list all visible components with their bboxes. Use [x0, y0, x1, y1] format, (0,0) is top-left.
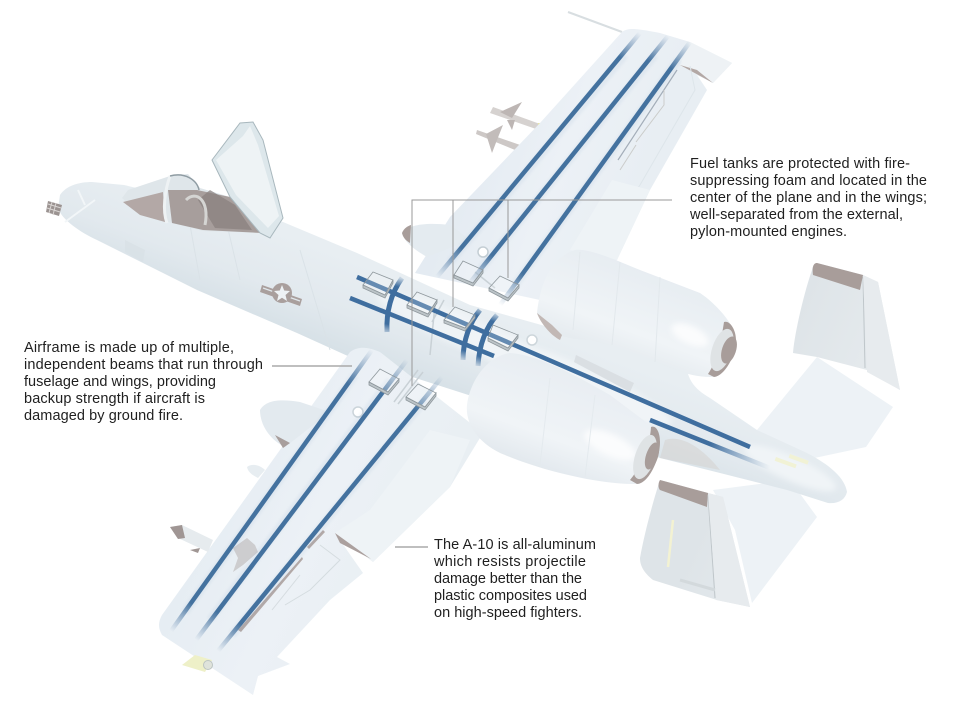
insignia on wing	[233, 538, 258, 572]
lower wing	[159, 348, 483, 695]
flap tracks and slats	[394, 272, 495, 404]
callout: fuel tanks: center of the plane and in the wings;	[690, 190, 927, 206]
callout: aluminum: which resists projectile	[433, 554, 586, 570]
tank 4	[488, 325, 518, 351]
horizontal stabilizer: upper	[757, 357, 893, 460]
vertical fin: upper	[793, 263, 900, 390]
insignia: star	[260, 283, 302, 306]
fuselage beams	[350, 277, 770, 468]
callout: fuel tanks: pylon-mounted engines.	[690, 224, 847, 240]
vertical fin: lower	[640, 480, 750, 607]
callout: fuel tanks: suppressing foam and located in the	[690, 173, 927, 189]
fuselage	[58, 182, 847, 503]
callout: airframe: fuselage and wings, providing	[24, 374, 216, 390]
callout: aluminum: The A-10 is all-aluminum	[434, 537, 596, 553]
upper wing	[415, 29, 732, 300]
fuel tanks	[363, 261, 519, 410]
upper wing pod	[402, 224, 470, 257]
callout: airframe: backup strength if aircraft is	[24, 391, 205, 407]
callout: aluminum: plastic composites used	[434, 588, 587, 604]
leader line: aluminum	[395, 546, 428, 548]
pitot probe	[568, 12, 622, 32]
lower engine	[467, 353, 662, 484]
tank 5	[454, 261, 483, 286]
tank 7	[369, 369, 399, 395]
callout: airframe: independent beams that run through	[24, 357, 263, 373]
horizontal stabilizer: lower	[713, 480, 817, 603]
tank 1	[363, 272, 393, 298]
callout: airframe: Airframe is made up of multiple,	[24, 340, 234, 356]
cockpit	[122, 174, 262, 233]
tank 2	[407, 292, 437, 317]
tank 3	[444, 307, 475, 331]
callout: fuel tanks: Fuel tanks are protected with fire-	[690, 156, 910, 172]
upper engine	[537, 250, 740, 377]
wing beams: upper wing	[437, 33, 690, 305]
gun muzzle	[46, 201, 62, 216]
wing pylon and pod	[247, 400, 330, 478]
open canopy	[212, 122, 283, 238]
leader line: airframe	[272, 365, 352, 367]
lower wing store	[170, 525, 213, 553]
callout: fuel tanks: well-separated from the external,	[689, 207, 903, 223]
callout: airframe: damaged by ground fire.	[24, 408, 183, 424]
callout: aluminum: damage better than the	[434, 571, 582, 587]
wing beams: lower wing	[171, 350, 442, 651]
leader lines: fuel tanks	[412, 200, 672, 386]
fuselage frames	[387, 278, 497, 366]
beam glow	[185, 55, 678, 635]
tank 6	[489, 276, 519, 301]
tank 8	[406, 384, 436, 410]
upper wing missiles	[476, 102, 545, 153]
callout: aluminum: on high-speed fighters.	[434, 605, 582, 621]
